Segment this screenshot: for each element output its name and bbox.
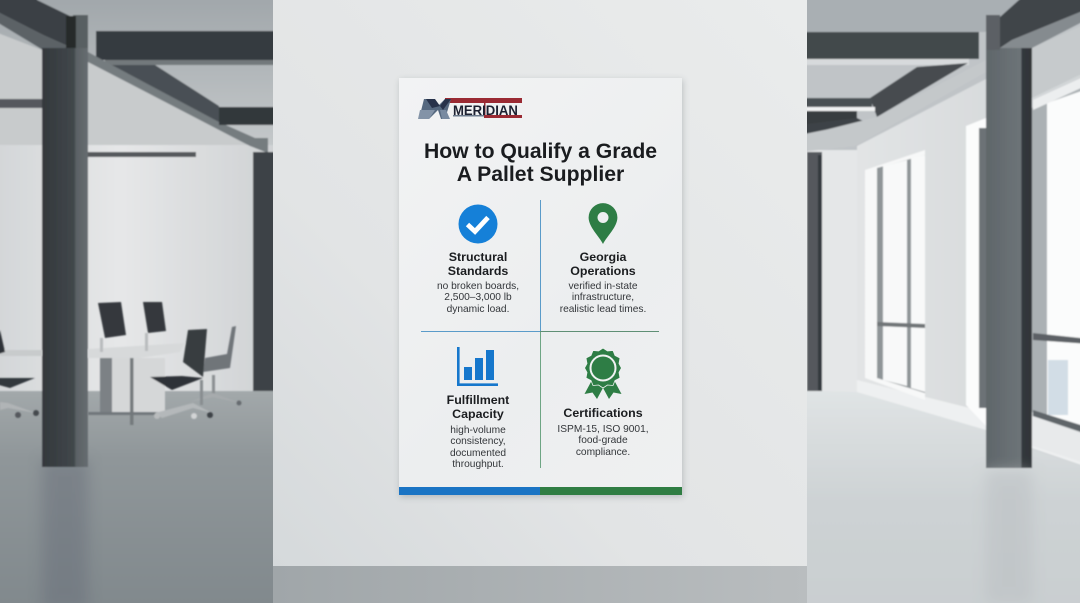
description [557, 424, 649, 458]
description [437, 281, 519, 315]
vertical divider: green [540, 331, 541, 468]
description: no broken boards, [437, 281, 519, 292]
heading: Certifications [563, 406, 643, 420]
logo wordmark: MERIDIAN [453, 103, 518, 118]
icon: blue check [458, 204, 498, 244]
icon: green award rosette [584, 348, 622, 399]
poster [399, 78, 682, 495]
right office room [800, 0, 1080, 603]
description: throughput. [452, 459, 504, 470]
panel: georgia operations [560, 203, 646, 315]
description [450, 425, 506, 470]
horizontal divider: green [540, 331, 659, 332]
left office room [0, 0, 280, 603]
description: realistic lead times. [560, 304, 646, 315]
title: How to Qualify a Grade [424, 140, 657, 162]
description: high-volume [450, 425, 506, 436]
description: 2,500–3,000 lb [444, 292, 512, 303]
heading: Fulfillment [447, 393, 509, 407]
panel: fulfillment capacity [447, 347, 510, 470]
desks, monitors and chairs [0, 302, 242, 425]
footer bar: blue [399, 487, 540, 495]
panel: certifications [557, 348, 649, 458]
footer bar: green [540, 487, 682, 495]
title [424, 140, 657, 186]
description [560, 281, 646, 315]
vertical divider: blue [540, 200, 541, 331]
heading: Structural [449, 250, 507, 264]
center wall [273, 0, 807, 566]
heading [570, 250, 636, 278]
description: dynamic load. [447, 304, 509, 315]
description: infrastructure, [572, 292, 634, 303]
icon: blue bar chart [457, 347, 498, 386]
heading: Operations [570, 264, 636, 278]
logo: Meridian [418, 98, 522, 119]
panel: structural standards [437, 204, 519, 315]
heading: Georgia [580, 250, 626, 264]
description: food-grade [578, 435, 628, 446]
description: compliance. [576, 447, 630, 458]
wall base floor strip [273, 566, 807, 603]
description: verified in-state [568, 281, 638, 292]
title: A Pallet Supplier [457, 163, 624, 186]
heading: Capacity [452, 407, 504, 421]
description: ISPM-15, ISO 9001, [557, 424, 649, 435]
horizontal divider: blue [421, 331, 540, 332]
heading: Standards [448, 264, 508, 278]
description: documented [450, 448, 506, 459]
heading [447, 393, 510, 421]
description: consistency, [450, 436, 506, 447]
icon: green location pin [588, 203, 618, 244]
heading [448, 250, 508, 278]
